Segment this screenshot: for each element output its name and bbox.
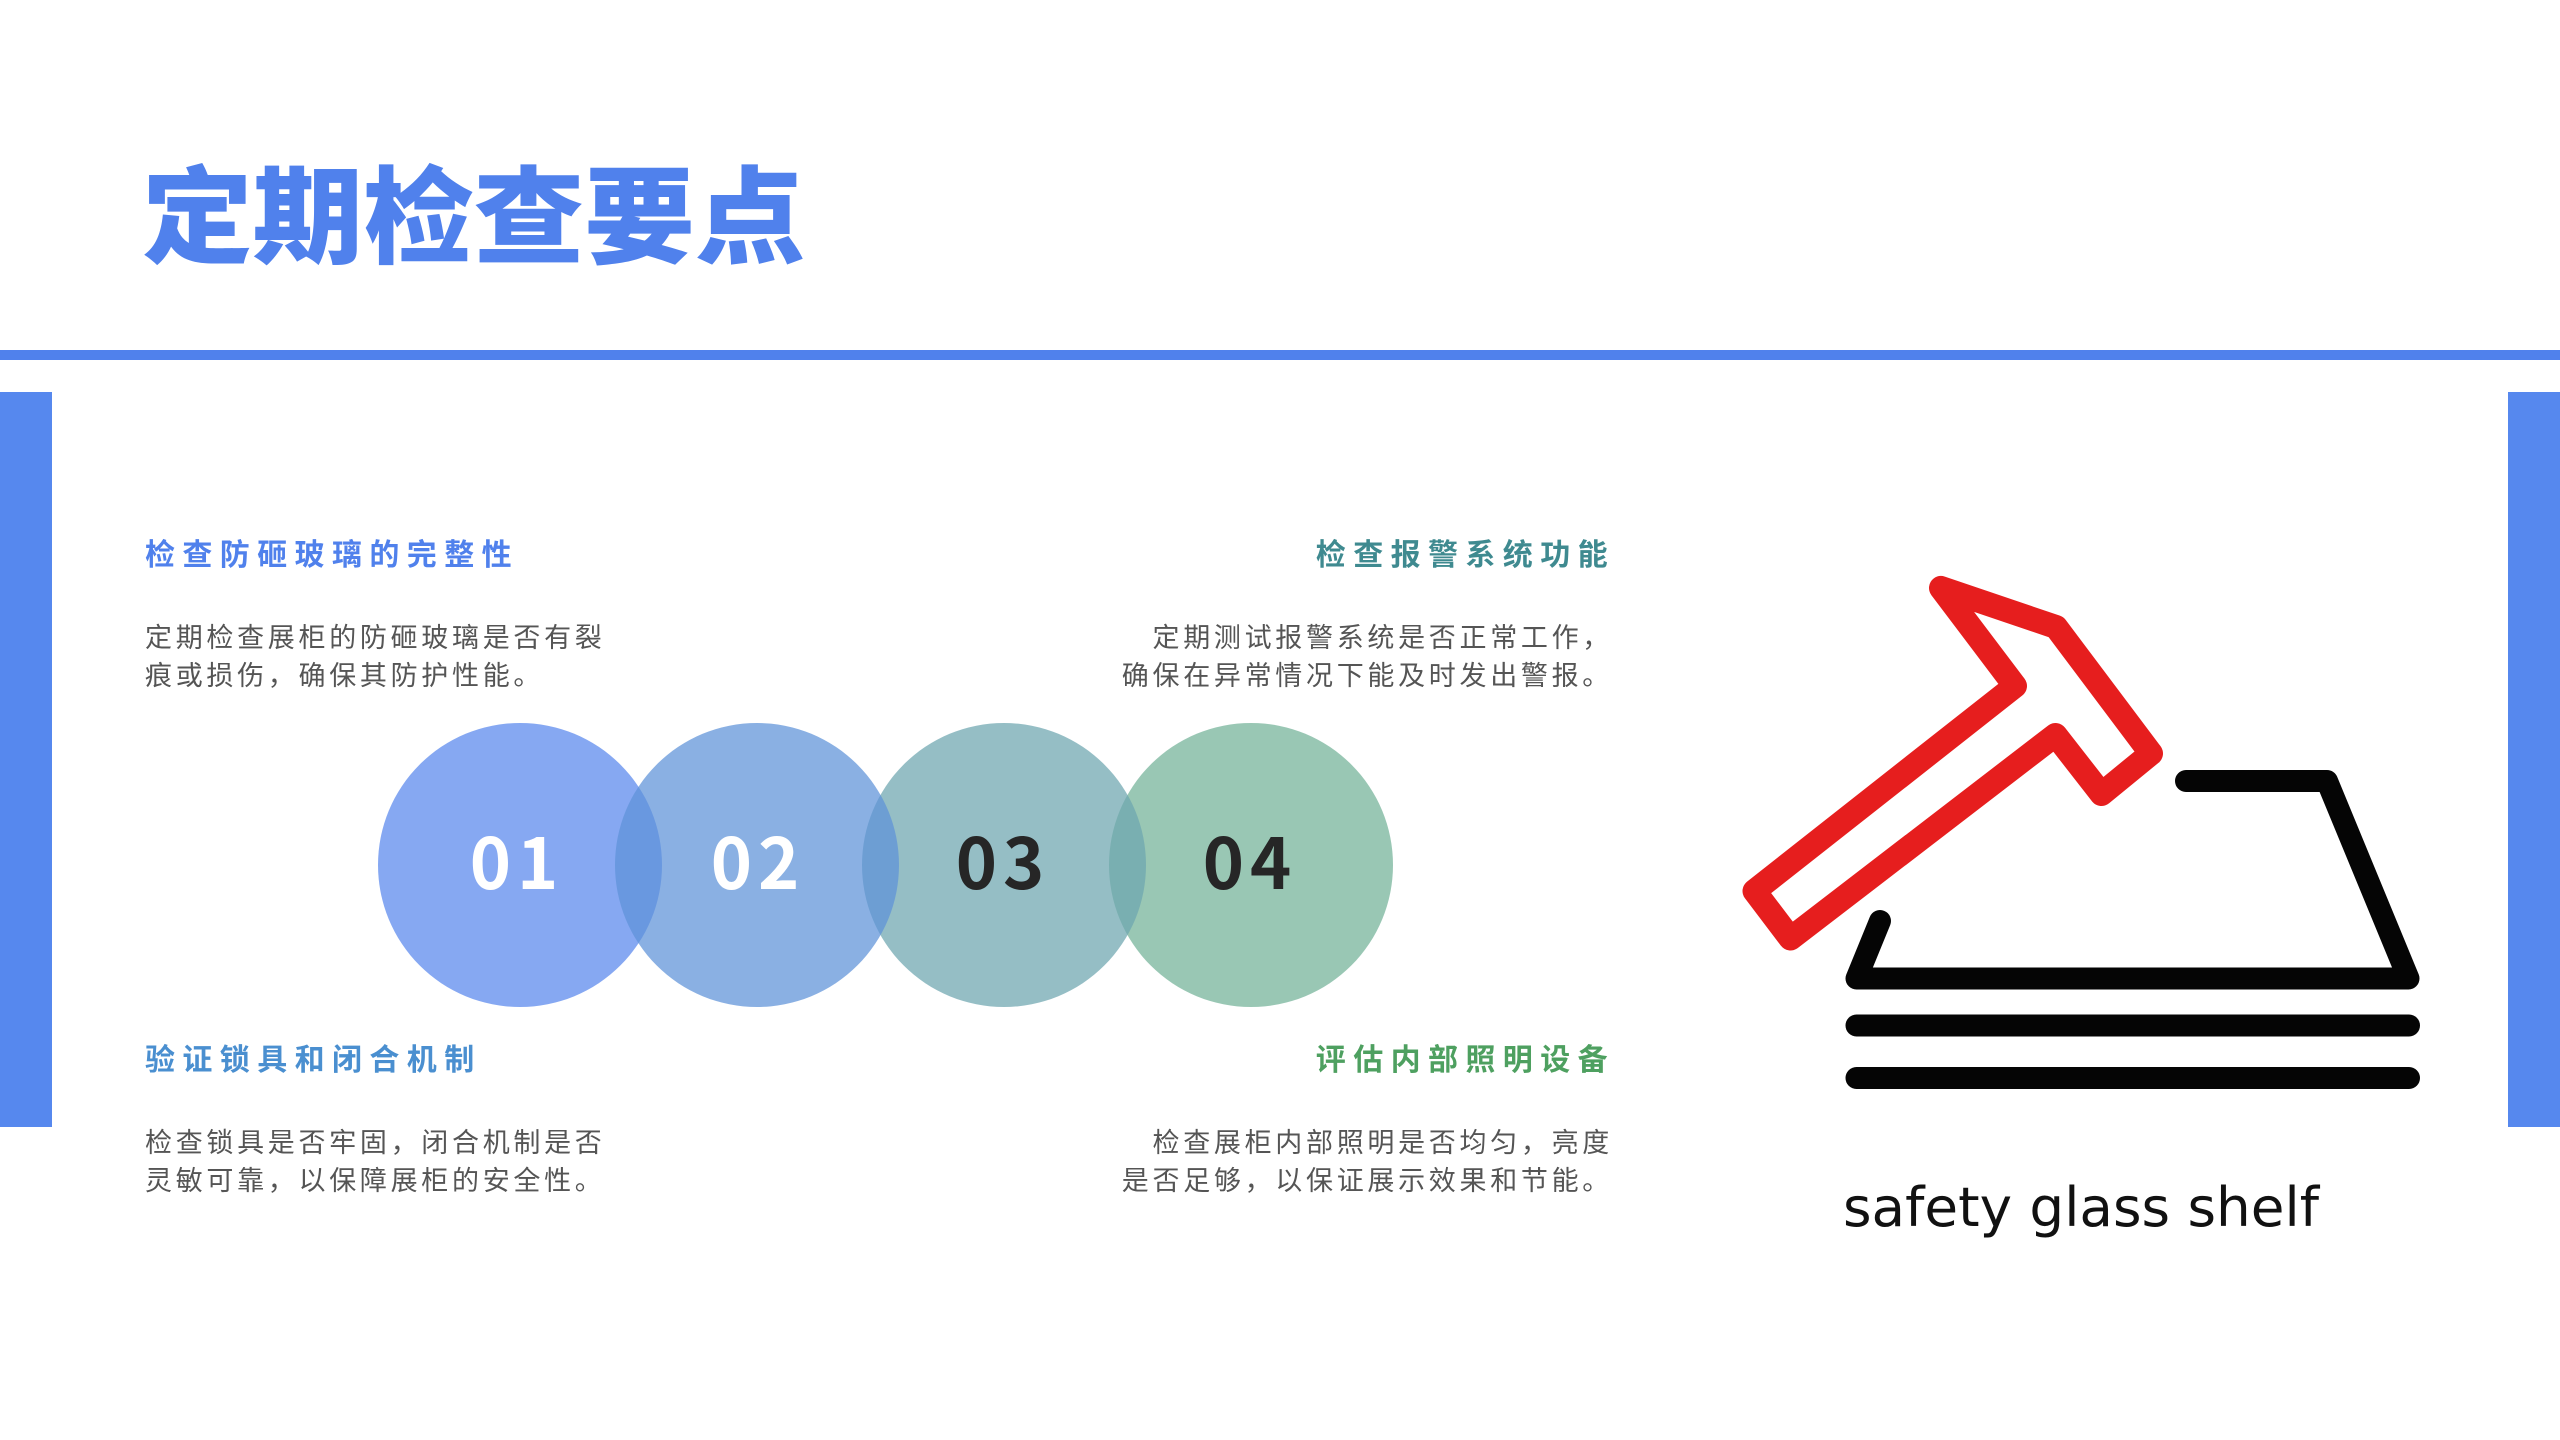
icon: shelf line 2	[1856, 1067, 2409, 1089]
item 1 heading: 检查防砸玻璃的完整性	[145, 539, 519, 572]
circle 02	[615, 723, 899, 1007]
icon: shelf line 1	[1856, 1014, 2409, 1036]
item 1 body: 痕或损伤，确保其防护性能。	[145, 661, 544, 691]
number 04: 04	[1203, 809, 1297, 910]
item 1 body	[145, 623, 606, 691]
right side bar	[2508, 392, 2560, 1127]
number 01: 01	[470, 809, 564, 910]
circle chain	[378, 723, 1393, 1007]
item 4 heading: 评估内部照明设备	[1316, 1044, 1615, 1077]
circle 03	[862, 723, 1146, 1007]
item 3 body: 检查锁具是否牢固，闭合机制是否	[145, 1128, 606, 1158]
title: 定期检查要点	[142, 132, 805, 286]
number 03: 03	[956, 809, 1050, 910]
header rule	[0, 350, 2560, 360]
icon: red hammer	[1754, 588, 2151, 938]
item 2 body	[1122, 623, 1613, 691]
icon: glass shelf top	[1856, 781, 2408, 978]
item 3 body	[145, 1128, 606, 1196]
circle 01	[378, 723, 662, 1007]
item 2 body: 确保在异常情况下能及时发出警报。	[1122, 661, 1613, 691]
item 4 body	[1122, 1128, 1613, 1196]
item 3 heading: 验证锁具和闭合机制	[145, 1044, 482, 1077]
item 4 body: 检查展柜内部照明是否均匀，亮度	[1152, 1128, 1613, 1158]
left side bar	[0, 392, 52, 1127]
item 1 body: 定期检查展柜的防砸玻璃是否有裂	[145, 623, 606, 653]
item 3 body: 灵敏可靠，以保障展柜的安全性。	[145, 1166, 606, 1196]
item 4 body: 是否足够，以保证展示效果和节能。	[1122, 1166, 1613, 1196]
number 02: 02	[711, 809, 805, 910]
icon caption: safety glass shelf	[1843, 1176, 2321, 1239]
item 2 heading: 检查报警系统功能	[1316, 539, 1615, 572]
item 2 body: 定期测试报警系统是否正常工作，	[1152, 623, 1613, 653]
circle 04	[1109, 723, 1393, 1007]
